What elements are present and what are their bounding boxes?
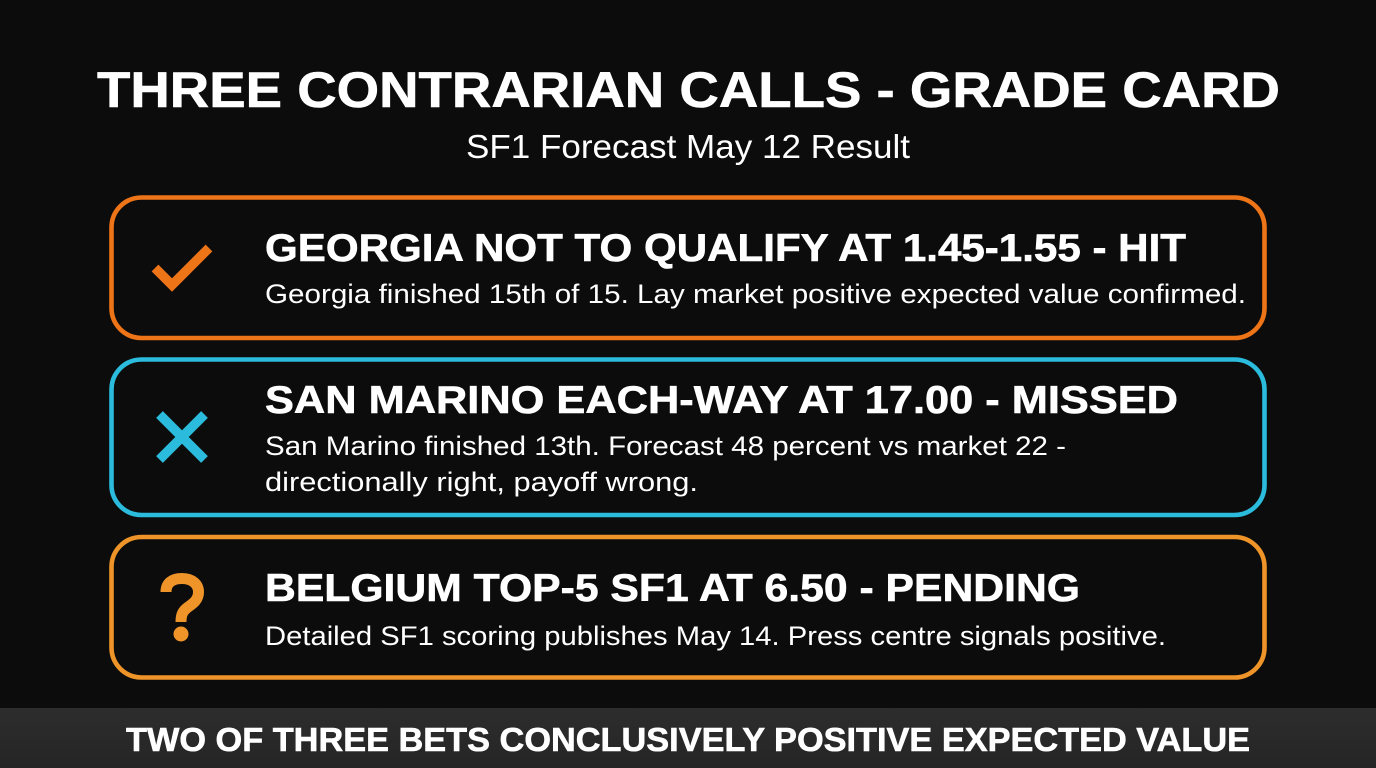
footer text: TWO OF THREE BETS CONCLUSIVELY POSITIVE EXPECTED VALUE bbox=[126, 722, 1250, 759]
text: San Marino result bbox=[265, 431, 1066, 497]
card border bbox=[112, 360, 1264, 515]
heading: Belgium: BELGIUM TOP-5 SF1 AT 6.50 - PENDING bbox=[265, 567, 1080, 610]
footer banner bbox=[0, 708, 1376, 768]
panel: Belgium call bbox=[112, 537, 1264, 678]
panel: San Marino call bbox=[112, 360, 1264, 515]
title: THREE CONTRARIAN CALLS - GRADE CARD bbox=[97, 62, 1280, 118]
panel: Georgia call bbox=[112, 198, 1264, 338]
icon: cross mark bbox=[160, 414, 204, 460]
text: Belgium status: Detailed SF1 scoring publishes May 14. Press centre signals positive. bbox=[265, 621, 1166, 651]
text: San Marino result: San Marino finished 13th. Forecast 48 percent vs market 22 - bbox=[265, 431, 1066, 461]
subtitle: SF1 Forecast May 12 Result bbox=[466, 128, 910, 165]
heading: Georgia: GEORGIA NOT TO QUALIFY AT 1.45-1.55 - HIT bbox=[265, 227, 1186, 270]
icon: check mark bbox=[155, 248, 209, 285]
card border bbox=[112, 537, 1264, 678]
icon: question mark bbox=[166, 578, 198, 642]
heading: San Marino: SAN MARINO EACH-WAY AT 17.00 - MISSED bbox=[265, 379, 1178, 422]
text: Georgia result: Georgia finished 15th of 15. Lay market positive expected value confirmed. bbox=[265, 279, 1246, 309]
text: San Marino result: directionally right, payoff wrong. bbox=[265, 467, 698, 497]
card border bbox=[112, 198, 1264, 338]
